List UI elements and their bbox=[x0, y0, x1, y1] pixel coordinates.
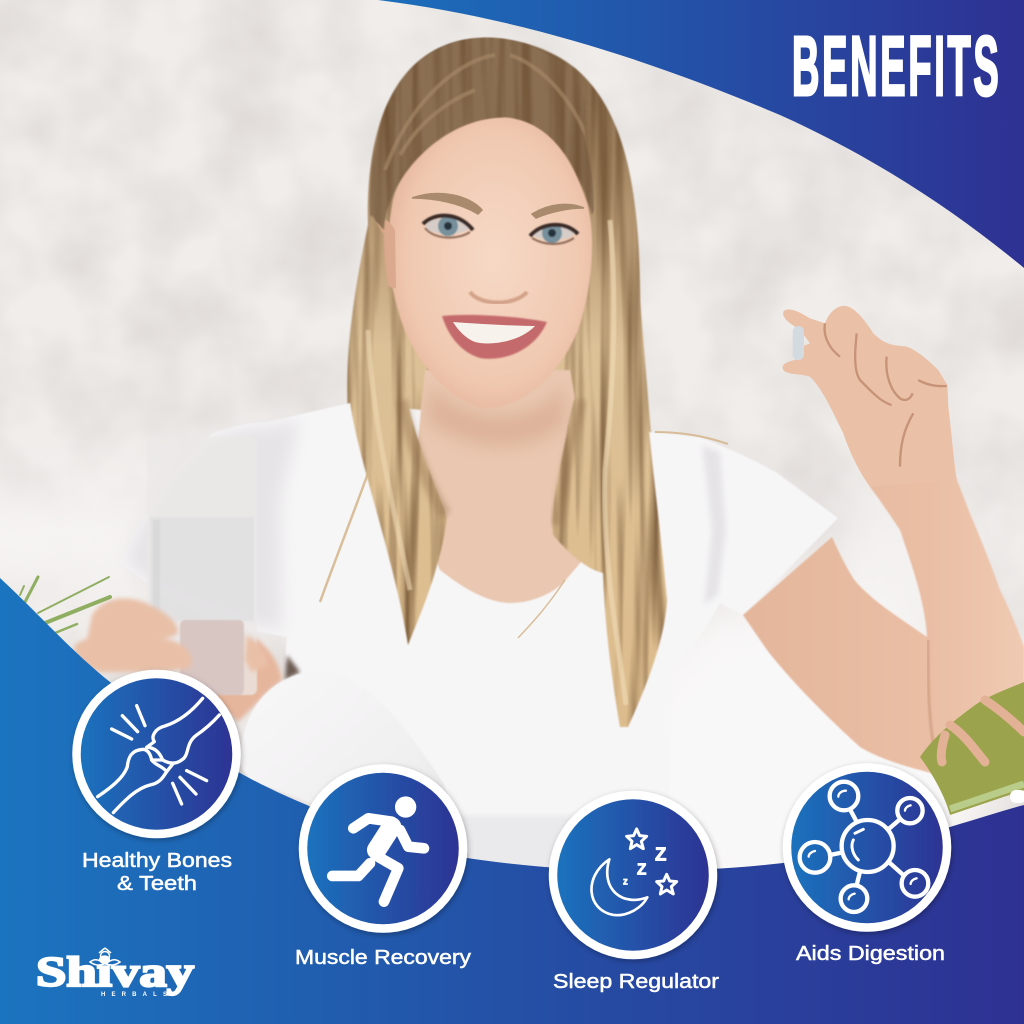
logo: Shivay Herbals: Shivay bbox=[36, 950, 194, 996]
stray hair wisps bbox=[320, 432, 728, 638]
hair back bbox=[347, 38, 664, 600]
icon badge: sleep: z bbox=[623, 876, 628, 887]
label: Healthy Bones & Teeth: Healthy Bones bbox=[82, 850, 232, 872]
label: Aids Digestion: Aids Digestion bbox=[796, 943, 945, 965]
label: Sleep Regulator: Sleep Regulator bbox=[553, 971, 719, 993]
hair highlights top bbox=[385, 55, 598, 170]
label: Healthy Bones & Teeth bbox=[82, 850, 232, 895]
bottom blue wave panel bbox=[0, 578, 1024, 1024]
title: BENEFITS: BENEFITS bbox=[792, 19, 1001, 113]
hair right front strand bbox=[552, 100, 667, 727]
icon badge: sleep bbox=[553, 795, 713, 955]
logo: Shivay Herbals: HERBALS bbox=[101, 992, 167, 998]
icon badge: runner bbox=[303, 768, 463, 928]
brows bbox=[412, 194, 584, 218]
arm bbox=[743, 460, 1024, 800]
neck and chest bbox=[412, 370, 600, 603]
ear bbox=[373, 219, 396, 288]
shirt shading bbox=[125, 420, 726, 875]
label: Muscle Recovery: Muscle Recovery bbox=[295, 947, 471, 969]
icon badge: molecule bbox=[787, 768, 947, 928]
fingers on glass bbox=[75, 598, 268, 672]
decorative palm leaf left bbox=[20, 577, 110, 633]
icon badge: sleep: Z bbox=[637, 861, 646, 878]
face bbox=[388, 117, 592, 408]
neck shadow bbox=[425, 385, 565, 447]
label: Healthy Bones & Teeth: & Teeth bbox=[117, 873, 197, 895]
hand holding capsule bbox=[783, 306, 957, 487]
shirt bbox=[120, 403, 838, 872]
nose bbox=[470, 292, 527, 302]
knee bbox=[240, 670, 470, 860]
icon badge: bones bbox=[76, 674, 236, 834]
mouth bbox=[442, 315, 547, 359]
hair left front strand bbox=[349, 215, 447, 645]
underarm shadow bbox=[285, 655, 300, 680]
hair streaks bbox=[368, 220, 626, 705]
woman portrait illustration bbox=[75, 38, 1024, 875]
decorative leaf right bbox=[920, 682, 1024, 815]
hair top dark bbox=[370, 38, 603, 230]
icon badge: sleep: Z bbox=[655, 844, 666, 865]
top-right blue corner panel bbox=[378, 0, 1024, 268]
elbow crease bbox=[928, 640, 936, 760]
logo lotus icon bbox=[90, 948, 120, 965]
eyes bbox=[423, 216, 578, 244]
left arm behind glass bbox=[205, 633, 282, 722]
glass of water bbox=[147, 437, 257, 695]
